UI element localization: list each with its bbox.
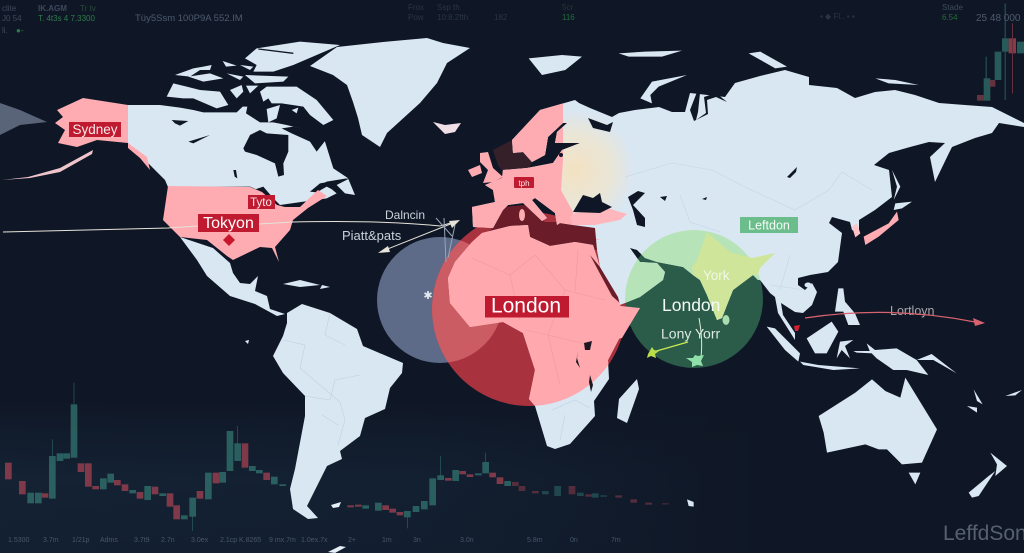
inland seas xyxy=(559,92,797,227)
label: small europe tag: tph xyxy=(518,179,530,188)
land: uk and ireland xyxy=(468,152,503,183)
zone circle: green session xyxy=(625,230,763,368)
market chart backdrop xyxy=(0,400,760,553)
land: south america xyxy=(273,304,403,519)
land: turkey (highlighted) xyxy=(570,208,627,225)
bottom axis labels: 3.0n xyxy=(460,537,474,544)
marker: blue zone star: ✱ xyxy=(423,290,433,302)
top ticker readouts: 182 xyxy=(494,13,508,22)
land: small atlantic islands xyxy=(245,340,346,553)
label: london in green zone: London xyxy=(662,295,720,315)
bottom axis labels: 1/21p xyxy=(72,537,90,544)
label: lortloyn: Lortloyn xyxy=(890,304,935,318)
top ticker readouts: 116 xyxy=(562,13,575,22)
bottom axis labels: 1.5300 xyxy=(8,537,30,544)
zone circle: blue session xyxy=(377,237,503,363)
label: lony yorr: Lony Yorr xyxy=(661,326,720,342)
top ticker readouts: Ssp th xyxy=(437,3,460,12)
bottom axis labels: Adms xyxy=(100,537,118,544)
label: york: York xyxy=(703,268,730,283)
bottom axis labels: 9 mx.7m xyxy=(269,537,296,544)
land: hainan xyxy=(804,282,812,288)
top ticker readouts: li. xyxy=(2,26,8,35)
land: caribbean islands xyxy=(283,280,330,289)
bottom axis labels: 3.0ex xyxy=(191,537,209,544)
candlestick chart: bottom left xyxy=(5,383,511,531)
bottom axis labels: 2+ xyxy=(348,537,356,544)
arrow: yellow route in green zone xyxy=(647,318,704,367)
top ticker readouts: 25 48 000 xyxy=(976,13,1021,24)
land: united states (highlighted) xyxy=(163,186,327,262)
land: canada with arctic archipelago xyxy=(128,42,355,205)
land: africa xyxy=(448,225,640,449)
label: piatt spots: Piatt&pats xyxy=(342,228,402,243)
mediterranean sea tint xyxy=(482,205,597,250)
label: leftdon xyxy=(740,217,798,233)
land: new zealand and pacific islands xyxy=(687,389,1022,507)
top ticker readouts: 5cr xyxy=(562,3,573,12)
label: dalncin: Dalncin xyxy=(385,208,425,222)
land: iceland xyxy=(433,122,461,134)
candlestick chart: bottom centre fading out xyxy=(512,482,669,505)
top ticker readouts: ▪ ◆ Fl.. ▪ ▪ xyxy=(820,12,855,21)
north sea tint xyxy=(493,140,532,172)
top ticker readouts xyxy=(2,3,1021,35)
bottom axis labels: 3n xyxy=(413,537,421,544)
land: india xyxy=(692,232,775,320)
top ticker readouts: 6.54 xyxy=(942,13,958,22)
land: sri lanka xyxy=(722,315,730,325)
label: leftdon: Leftdon xyxy=(748,218,790,232)
top ticker readouts: lK.AGM xyxy=(38,4,67,13)
top ticker readouts: Pow xyxy=(408,13,424,22)
land: great rift lakes xyxy=(576,341,593,392)
top ticker readouts: J0 54 xyxy=(2,14,22,23)
top ticker readouts: Tr tv xyxy=(80,4,96,13)
top ticker readouts: clite xyxy=(2,4,17,13)
bottom axis labels: 7m xyxy=(611,537,621,544)
bottom axis labels: 5.8m xyxy=(527,537,543,544)
arrow: red pacific route xyxy=(794,312,985,331)
land: greenland xyxy=(310,38,470,147)
bottom axis labels: 1.0ex.7x xyxy=(301,537,328,544)
land: eurasia xyxy=(472,70,1024,340)
label: tyto: Tyto xyxy=(250,197,272,209)
top ticker readouts: ●- xyxy=(16,26,24,35)
land: sardinia xyxy=(519,209,525,221)
land: alaska (highlighted) xyxy=(55,98,150,170)
bottom axis labels xyxy=(8,537,621,544)
top ticker readouts: 10:8.2fth xyxy=(437,13,468,22)
bottom axis labels: 0n xyxy=(570,537,578,544)
bottom axis labels: K.8265 xyxy=(239,537,261,544)
bottom axis labels: 3.7t9 xyxy=(134,537,150,544)
marker: diamond xyxy=(223,234,235,246)
label: london: London xyxy=(491,294,561,318)
land: japan, korea and sakhalin xyxy=(852,170,912,245)
bottom axis labels: 2.7n xyxy=(161,537,175,544)
top ticker readouts: T. 4t3s 4 7.3300 xyxy=(38,14,95,23)
bottom axis labels: 1m xyxy=(382,537,392,544)
land: arctic islands xyxy=(529,51,919,103)
label: tokyon: Tokyon xyxy=(203,215,254,232)
top ticker readouts: Stade xyxy=(942,3,963,12)
land: madagascar xyxy=(617,379,639,423)
bottom axis labels: 2.1cp xyxy=(220,537,237,544)
land: chukotka edge xyxy=(0,103,47,135)
label: tyto xyxy=(248,195,275,209)
land: australia xyxy=(819,378,937,484)
top ticker readouts: Tüy5Ssm 100P9A 552.IM xyxy=(135,13,243,24)
label: small europe tag xyxy=(514,177,534,188)
land: alaska peninsula tail xyxy=(2,150,93,180)
top ticker readouts: Frox xyxy=(408,3,424,12)
land: mexico and central america xyxy=(180,237,285,316)
bottom axis labels: 3.7m xyxy=(43,537,59,544)
arrow: long atlantic route xyxy=(3,218,460,262)
candlestick chart: top right xyxy=(977,3,1024,101)
land: southeast asia islands xyxy=(767,288,957,375)
label: sydney: Sydney xyxy=(72,122,118,137)
zone circle: red session xyxy=(432,212,626,406)
